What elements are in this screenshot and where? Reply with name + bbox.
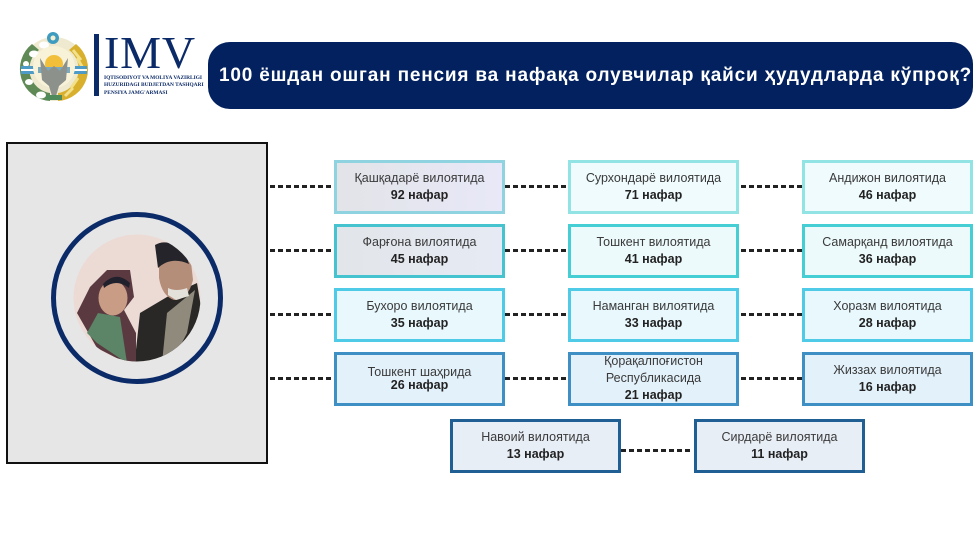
connector row 2 <box>270 249 802 252</box>
connector row 1 <box>270 185 802 188</box>
box: Bukhara <box>334 288 505 342</box>
logo: organisation name: HUZURIDAGI BUDJETDAN TASHQARI <box>104 82 204 88</box>
box: Karakalpakstan: Қорақалпоғистон <box>604 354 703 368</box>
box: Fergana: Фарғона вилоятида <box>362 235 476 249</box>
box: Karakalpakstan: 21 нафар <box>625 388 682 402</box>
box: Namangan: 33 нафар <box>625 316 682 330</box>
box: Kashkadarya: Қашқадарё вилоятида <box>354 171 485 185</box>
box: Syrdarya: Сирдарё вилоятида <box>721 430 838 444</box>
box: Navoi <box>450 419 621 473</box>
box: Kashkadarya: 92 нафар <box>391 188 448 202</box>
box: Navoi: 13 нафар <box>507 447 564 461</box>
box: Jizzakh <box>802 352 973 406</box>
box: Tashkent city <box>334 352 505 406</box>
box: Tashkent region: 41 нафар <box>625 252 682 266</box>
box: Jizzakh: Жиззах вилоятида <box>833 363 942 377</box>
box: Fergana <box>334 224 505 278</box>
logo: state emblem <box>20 32 88 101</box>
box: Khorezm: 28 нафар <box>859 316 916 330</box>
box: Surkhandarya: Сурхондарё вилоятида <box>586 171 721 185</box>
box: Andijan <box>802 160 973 214</box>
box: Samarkand: Самарқанд вилоятида <box>822 235 953 249</box>
box: Syrdarya <box>694 419 865 473</box>
box: Karakalpakstan: Республикасида <box>606 371 701 385</box>
box: Fergana: 45 нафар <box>391 252 448 266</box>
box: Surkhandarya <box>568 160 739 214</box>
box: Samarkand: 36 нафар <box>859 252 916 266</box>
logo: organisation name: PENSIYA JAMG'ARMASI <box>104 90 167 96</box>
box: Surkhandarya: 71 нафар <box>625 188 682 202</box>
box: Syrdarya: 11 нафар <box>751 447 808 461</box>
box: Tashkent region: Тошкент вилоятида <box>596 235 711 249</box>
photo panel <box>6 142 268 464</box>
logo: IMV wordmark: IMV <box>104 27 196 78</box>
box: Tashkent city: Тошкент шаҳрида <box>368 365 471 379</box>
box: Navoi: Навоий вилоятида <box>481 430 590 444</box>
logo: organisation name: IQTISODIYOT VA MOLIYA VAZIRLIGI <box>104 75 202 81</box>
box: Karakalpakstan <box>568 352 739 406</box>
title: 100 ёшдан ошган пенсия ва нафақа олувчилар қайси ҳудудларда кўпроқ? <box>219 65 972 86</box>
connector row 3 <box>270 313 802 316</box>
box: Namangan: Наманган вилоятида <box>593 299 714 313</box>
box: Andijan: 46 нафар <box>859 188 916 202</box>
box: Tashkent region <box>568 224 739 278</box>
box: Jizzakh: 16 нафар <box>859 380 916 394</box>
box: Samarkand <box>802 224 973 278</box>
title banner <box>208 42 973 109</box>
box: Kashkadarya <box>334 160 505 214</box>
box: Khorezm <box>802 288 973 342</box>
box: Namangan <box>568 288 739 342</box>
box: Khorezm: Хоразм вилоятида <box>833 299 942 313</box>
circular photo with ring <box>51 212 223 384</box>
box: Tashkent city: 26 нафар <box>391 378 448 392</box>
connector row 4 <box>270 377 802 380</box>
box: Bukhara: 35 нафар <box>391 316 448 330</box>
logo: organisation name <box>104 75 204 96</box>
logo: vertical bar <box>94 34 99 96</box>
connector row 5 <box>621 449 693 452</box>
box: Bukhara: Бухоро вилоятида <box>366 299 473 313</box>
box: Andijan: Андижон вилоятида <box>829 171 946 185</box>
